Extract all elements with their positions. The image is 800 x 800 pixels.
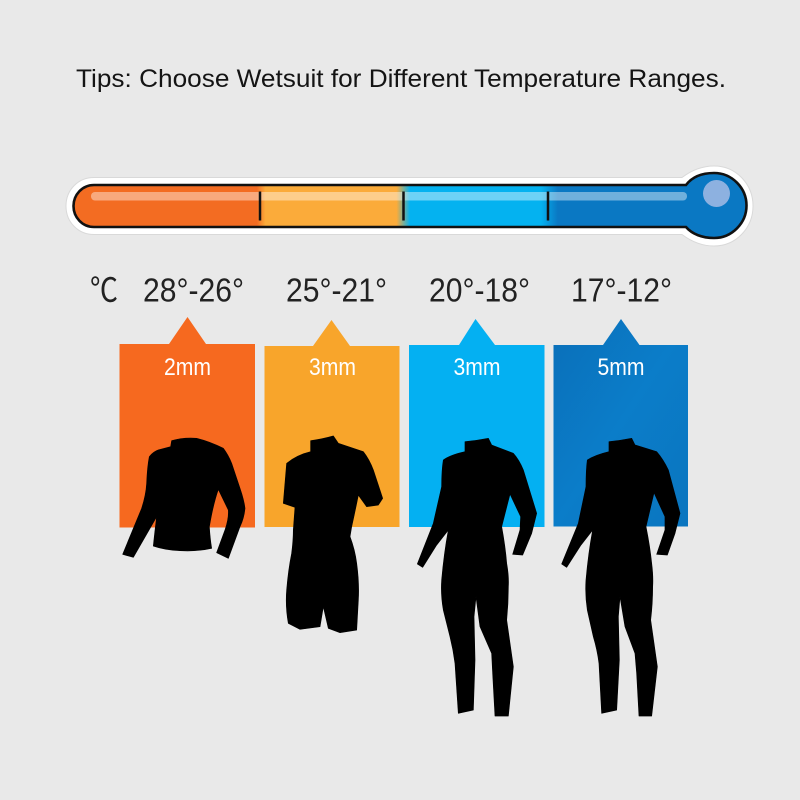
icon: long sleeve wetsuit top bbox=[123, 438, 245, 558]
panel: 3mm cyan: 3mm bbox=[454, 354, 500, 381]
bulb highlight bbox=[703, 180, 730, 207]
thermometer gradient tube bbox=[74, 173, 746, 238]
temperature unit: ℃ bbox=[90, 272, 118, 308]
icon: full wetsuit 3mm bbox=[417, 438, 537, 716]
thermometer bbox=[66, 166, 753, 246]
temperature range 1: 28°-26° bbox=[143, 272, 244, 308]
panel: 3mm cyan bbox=[409, 319, 544, 527]
icon: shorty wetsuit bbox=[283, 436, 383, 633]
panel: 5mm blue: 5mm bbox=[598, 354, 644, 381]
panel: 2mm orange bbox=[120, 317, 255, 528]
panel: 5mm blue bbox=[554, 319, 688, 526]
thermometer highlight bbox=[91, 192, 687, 200]
thermometer white border bbox=[66, 166, 753, 246]
panel: 3mm yellow bbox=[264, 320, 400, 527]
tick marks bbox=[260, 192, 548, 220]
title: Tips: Choose Wetsuit for Different Temperature Ranges. bbox=[76, 65, 726, 93]
panel: 3mm yellow: 3mm bbox=[309, 354, 356, 381]
temperature range 4: 17°-12° bbox=[571, 272, 672, 308]
icon: full wetsuit 5mm bbox=[562, 438, 680, 716]
panel: 2mm orange: 2mm bbox=[164, 354, 211, 381]
temperature range 2: 25°-21° bbox=[286, 272, 387, 308]
temperature range 3: 20°-18° bbox=[429, 272, 530, 308]
